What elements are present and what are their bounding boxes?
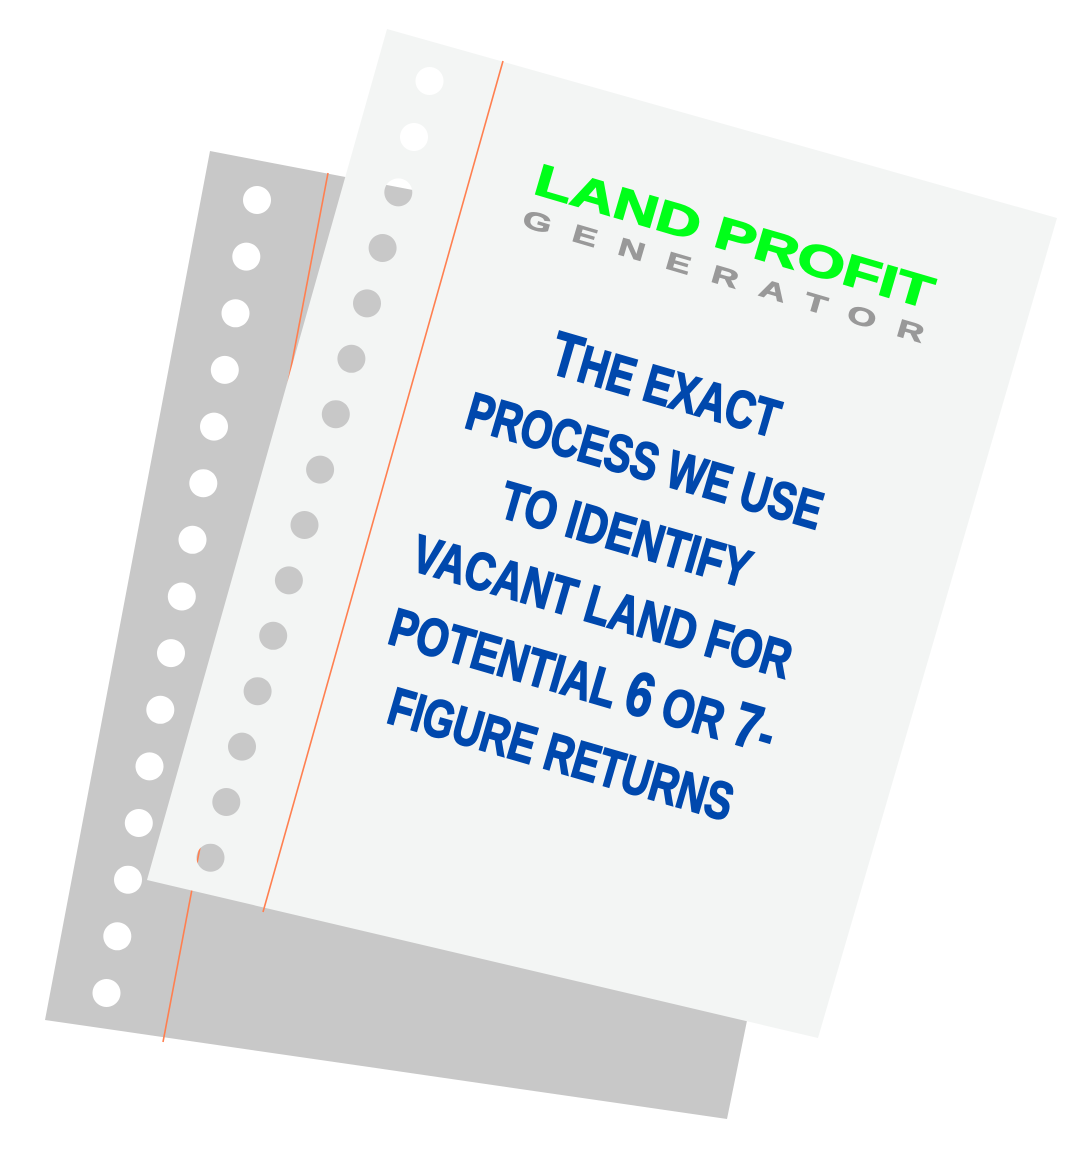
heading: main headline [382, 319, 830, 833]
heading: main headline: PROCESS WE USE [460, 382, 830, 541]
heading: main headline: FIGURE RETURNS [382, 677, 740, 833]
logo: Land Profit Generator: GENERATOR [519, 204, 928, 348]
panel: front light page [147, 29, 1057, 1038]
panel: back grey page [45, 151, 897, 1119]
heading: main headline: VACANT LAND FOR [406, 524, 799, 690]
heading: main headline: TO IDENTIFY [494, 471, 758, 600]
logo: Land Profit Generator: LAND PROFIT [529, 156, 939, 319]
heading: main headline: THE EXACT [543, 319, 789, 451]
heading: main headline: POTENTIAL 6 OR 7- [382, 590, 784, 767]
